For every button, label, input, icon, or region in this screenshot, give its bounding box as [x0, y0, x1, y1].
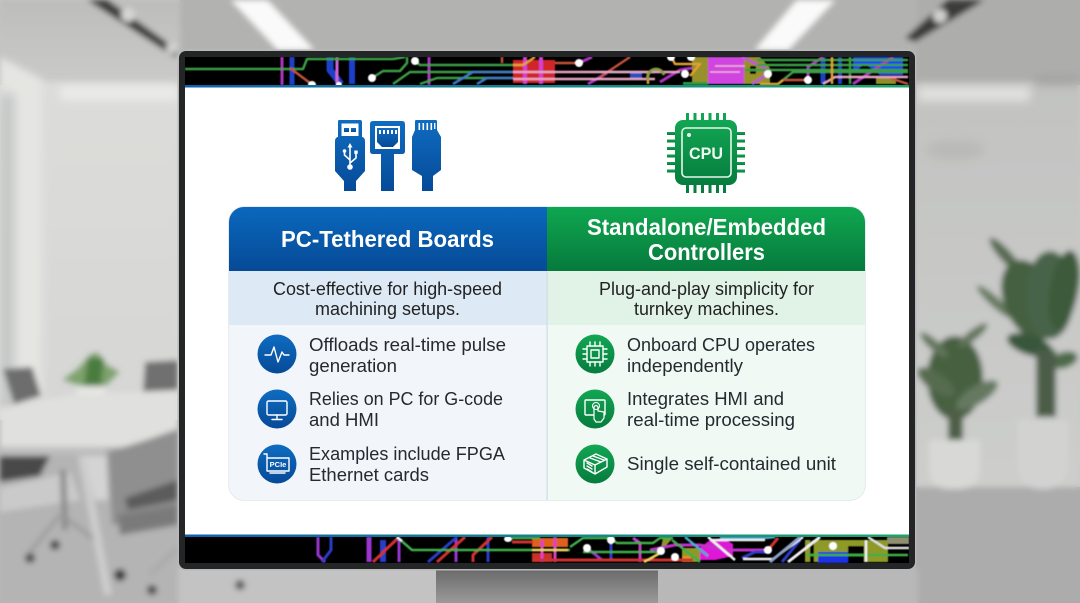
icon: USB and Ethernet connectors — [335, 120, 441, 191]
icon: CPU chip — [667, 113, 745, 193]
text: Onboard CPU operates independently — [627, 334, 815, 376]
bottom circuit strip — [318, 536, 909, 563]
panel: Standalone list background — [547, 325, 865, 500]
ceiling — [0, 0, 180, 90]
text: PC-Tethered summary — [273, 279, 502, 319]
text: Standalone summary: turnkey machines. — [634, 299, 779, 319]
panel: PC-Tethered list background — [229, 325, 547, 500]
text: Offloads real-time pulse generation: generation — [309, 355, 397, 376]
small plant leaves — [927, 336, 983, 420]
text: Examples include FPGA Ethernet cards: Examples include FPGA — [309, 443, 506, 464]
text: PC-Tethered summary: machining setups. — [315, 299, 460, 319]
panel: Standalone summary band — [547, 271, 865, 325]
icon: onboard processor — [576, 334, 614, 374]
icon: PCIe card — [258, 444, 296, 484]
heading: Standalone/Embedded Controllers: Standalone/Embedded — [587, 214, 826, 240]
ceiling lights — [231, 0, 314, 50]
bottom rule — [185, 534, 909, 537]
text: Offloads real-time pulse generation — [309, 334, 506, 376]
text: Relies on PC for G-code and HMI: and HMI — [309, 409, 379, 430]
panel: Standalone header — [547, 207, 865, 271]
right wall — [916, 82, 1080, 487]
panel: PC-Tethered summary band — [229, 271, 547, 325]
heading: PC-Tethered Boards: PC-Tethered Boards — [281, 226, 494, 252]
text: Examples include FPGA Ethernet cards — [309, 443, 506, 485]
text: Integrates HMI and real-time processing — [627, 388, 795, 430]
text: PC-Tethered summary: Cost-effective for high-speed — [273, 279, 502, 299]
monitor stand — [436, 570, 658, 603]
panel: PC-Tethered header — [229, 207, 547, 271]
icon: pulse waveform — [258, 334, 296, 374]
large plant leaves — [985, 234, 1027, 278]
heading: Standalone/Embedded Controllers — [587, 214, 826, 265]
text: Integrates HMI and real-time processing: real-time processing — [627, 409, 795, 430]
monitor frame — [178, 50, 916, 570]
text: Onboard CPU operates independently: independently — [627, 355, 744, 376]
comparison table — [229, 207, 865, 500]
icon: Ethernet plug — [412, 120, 441, 191]
left wall — [0, 58, 178, 420]
plant pots — [1018, 420, 1068, 489]
top rule — [185, 85, 909, 88]
icon: desktop monitor — [258, 390, 296, 428]
text: Relies on PC for G-code and HMI: Relies on PC for G-code — [309, 388, 503, 409]
heading: Standalone/Embedded Controllers: Controllers — [648, 239, 765, 265]
text: Standalone summary: Plug-and-play simplicity for — [599, 279, 814, 299]
right chair under table — [108, 430, 178, 525]
left column — [0, 95, 15, 425]
coves — [60, 86, 180, 100]
floors — [0, 440, 180, 603]
icon: self-contained box — [576, 444, 614, 484]
text: Offloads real-time pulse generation: Offloads real-time pulse — [309, 334, 506, 355]
chairs behind table — [3, 367, 41, 404]
table plant — [62, 352, 120, 386]
icon: CPU chip: CPU — [689, 145, 723, 163]
text: Integrates HMI and real-time processing: Integrates HMI and — [627, 388, 784, 409]
icon: touchscreen hand — [576, 390, 614, 428]
white slide area — [185, 85, 909, 537]
icon: PCIe card: PCIe — [270, 460, 286, 469]
left chair under table — [0, 448, 105, 454]
table legs — [78, 456, 112, 595]
icon: Ethernet socket — [370, 121, 405, 191]
icon: USB plug — [335, 120, 365, 191]
text: Single self-contained unit: Single self-contained unit — [627, 453, 836, 474]
top circuit strip — [185, 57, 909, 85]
table top — [0, 390, 178, 447]
text: Onboard CPU operates independently: Onboard CPU operates — [627, 334, 815, 355]
text: Examples include FPGA Ethernet cards: Ethernet cards — [309, 464, 429, 485]
text: Relies on PC for G-code and HMI — [309, 388, 503, 430]
text: Standalone summary — [599, 279, 814, 319]
track rails — [87, 0, 178, 58]
